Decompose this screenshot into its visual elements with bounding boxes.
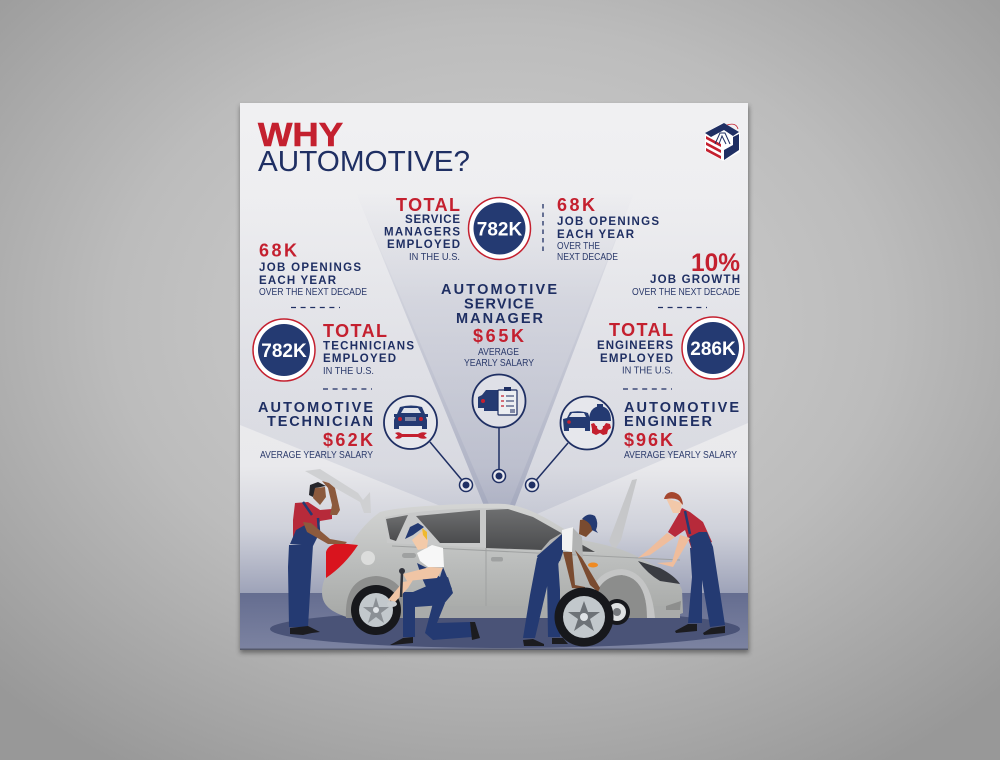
role: automotive technician [258, 400, 373, 461]
right leg [547, 560, 560, 637]
icon: logo cube [705, 123, 740, 161]
wrench tool [401, 573, 402, 597]
role: automotive technician: $62K [323, 430, 373, 450]
panel: service manager role [441, 282, 557, 369]
role: automotive engineer: AUTOMOTIVE [624, 400, 739, 416]
grey shirt [537, 527, 583, 560]
panel: technician stats [253, 240, 414, 461]
icon: technician car and wrench with pointer [384, 396, 472, 492]
poster [240, 103, 748, 650]
hair [309, 482, 326, 497]
head [579, 518, 593, 537]
panel: engineer stats [597, 249, 744, 461]
window trim [385, 508, 597, 553]
heading: total technicians: TOTAL [323, 321, 387, 341]
role: automotive technician: TECHNICIAN [267, 414, 373, 430]
overall straps [303, 502, 319, 532]
arm [403, 567, 443, 581]
job openings: technicians: JOB OPENINGS [259, 262, 361, 274]
stat circle: 782K managers [468, 198, 530, 260]
strap [685, 511, 690, 534]
rear arch [346, 576, 408, 618]
job openings: technicians [259, 240, 367, 298]
car body [322, 504, 683, 618]
illustration: mechanic rolling tire [523, 515, 614, 646]
trunk lid [305, 469, 371, 513]
role: automotive engineer [624, 400, 739, 461]
heading: total engineers: EMPLOYED [600, 353, 673, 365]
job openings: technicians: OVER THE NEXT DECADE [259, 287, 367, 298]
white shirt [417, 545, 444, 567]
stat circle: 782K managers: 782K [477, 220, 522, 240]
panel: service manager role: MANAGER [456, 311, 544, 327]
title [258, 116, 470, 178]
fuel cap [361, 551, 375, 565]
cap [405, 523, 424, 539]
heading: total service managers: SERVICE [405, 214, 460, 226]
poster drop shadow [240, 106, 749, 653]
front leg [403, 577, 453, 637]
shirt [668, 508, 712, 550]
white sleeve [562, 527, 573, 552]
heading: total service managers: MANAGERS [384, 226, 460, 238]
heading: total service managers: IN THE U.S. [409, 252, 460, 263]
role: automotive technician: AUTOMOTIVE [258, 400, 373, 416]
job growth: 10% [691, 249, 740, 277]
icon: service manager car and clipboard with pointer [472, 374, 526, 482]
glove [387, 601, 397, 607]
heading: total technicians: IN THE U.S. [323, 366, 374, 377]
headlight [638, 561, 680, 584]
job growth: OVER THE NEXT DECADE [632, 287, 740, 298]
heading: total service managers: TOTAL [396, 195, 460, 215]
job growth: JOB GROWTH [650, 274, 740, 286]
divider [542, 204, 544, 253]
job openings: managers: JOB OPENINGS [557, 216, 659, 228]
arms [563, 552, 585, 589]
lower arm [303, 522, 347, 544]
front shoe [390, 637, 413, 645]
stat circle: 782K technicians: 782K [261, 341, 307, 362]
overall bib [537, 534, 563, 561]
job openings: managers [557, 195, 659, 263]
head [412, 530, 428, 550]
heading: total engineers: IN THE U.S. [622, 366, 673, 376]
stat circle: 286K engineers [682, 317, 744, 379]
panel: service manager role: SERVICE [464, 296, 534, 312]
shoes [523, 639, 544, 646]
heading: total service managers: EMPLOYED [387, 239, 460, 251]
panel: service manager role: AVERAGE [478, 347, 519, 358]
heading: total engineers: TOTAL [609, 320, 673, 340]
legs [688, 547, 725, 627]
panel: service manager role: $65K [473, 326, 524, 346]
job openings: technicians: 68K [259, 240, 297, 260]
orange marker [588, 562, 598, 568]
stat circle: 286K engineers: 286K [690, 339, 736, 360]
lower arm [388, 580, 413, 602]
hair [422, 528, 427, 540]
title: WHY [258, 116, 343, 153]
illustration: kneeling mechanic [387, 523, 480, 645]
panel: service manager stats [384, 195, 659, 263]
illustration: car [305, 469, 683, 635]
held tire [554, 588, 614, 646]
hair [664, 492, 683, 505]
job openings: managers: OVER THE [557, 241, 600, 252]
heading: total technicians [323, 321, 414, 377]
illustration: floor shadow [270, 610, 740, 648]
stat circle: 782K technicians [253, 319, 315, 381]
raised arm [322, 481, 340, 515]
shoes [675, 624, 697, 633]
heading: total technicians: TECHNICIANS [323, 340, 414, 352]
lower trim [400, 606, 680, 618]
illustration: mechanic lifting trunk [288, 481, 347, 635]
heading: total technicians: EMPLOYED [323, 353, 396, 365]
heading: total service managers [384, 195, 460, 263]
legs [288, 545, 313, 627]
windows [386, 515, 408, 541]
head [313, 487, 326, 505]
front arch [590, 575, 647, 618]
panel: service manager role: AUTOMOTIVE [441, 282, 557, 298]
title: AUTOMOTIVE? [258, 146, 470, 178]
front wheel [604, 599, 630, 625]
role: automotive engineer: ENGINEER [624, 414, 713, 430]
cap [582, 515, 598, 533]
role: automotive technician: AVERAGE YEARLY SALARY [260, 450, 373, 461]
overall bib [689, 532, 713, 550]
job openings: technicians: EACH YEAR [259, 275, 337, 287]
overall bib [417, 563, 452, 589]
back shoe [470, 622, 480, 640]
job openings: managers: EACH YEAR [557, 229, 635, 241]
hood [609, 479, 637, 551]
shoes [290, 626, 320, 635]
panel: service manager role: YEARLY SALARY [464, 358, 534, 369]
icon: engineer car, hard hat and gear with pointer [526, 396, 614, 492]
heading: total engineers [597, 320, 673, 376]
role: automotive engineer: $96K [624, 430, 673, 450]
back leg [425, 603, 472, 640]
overall bib [290, 525, 318, 546]
shirt [293, 502, 332, 543]
heading: total engineers: ENGINEERS [597, 340, 673, 352]
job growth [632, 249, 740, 298]
tail light [326, 543, 358, 578]
door lines [392, 546, 680, 612]
arms [638, 533, 675, 558]
head [666, 498, 682, 513]
left leg [523, 558, 560, 638]
job openings: managers: NEXT DECADE [557, 252, 618, 263]
role: automotive engineer: AVERAGE YEARLY SALARY [624, 450, 737, 461]
illustration: mechanic at hood [638, 492, 725, 635]
bumper vent [666, 601, 681, 610]
rear wheel [351, 585, 401, 635]
job openings: managers: 68K [557, 195, 595, 215]
